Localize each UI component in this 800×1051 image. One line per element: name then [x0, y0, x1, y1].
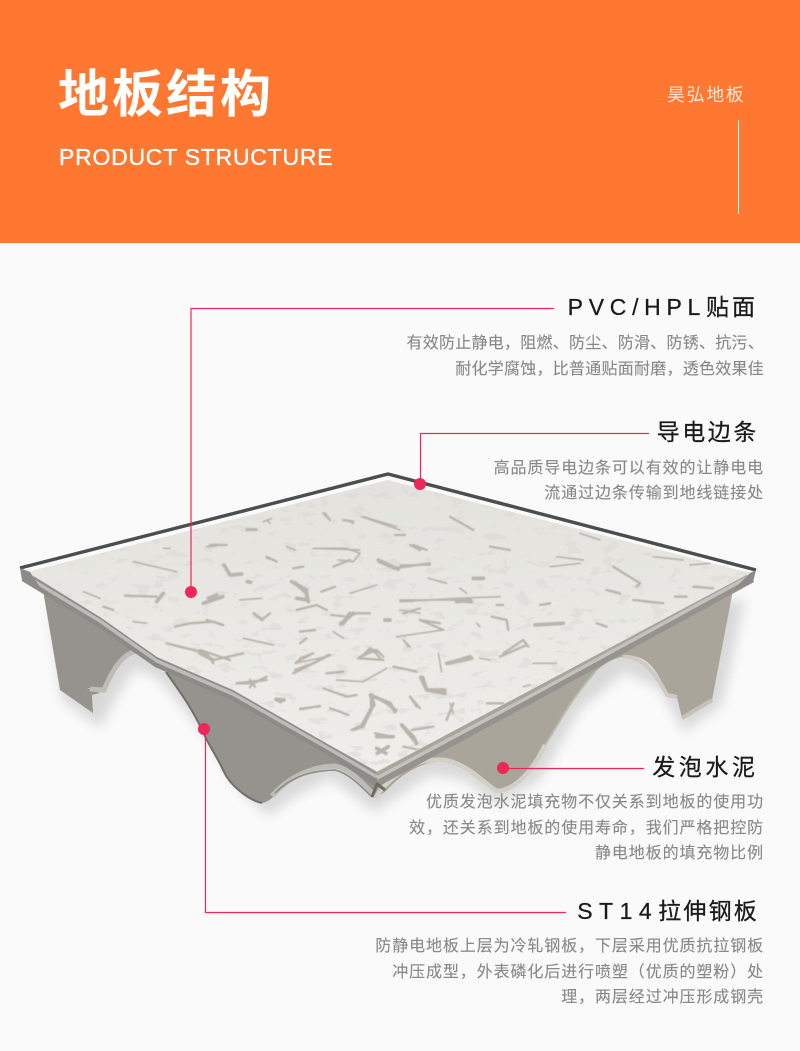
bottom marks: [237, 645, 530, 753]
left steel leg and cement side: [30, 572, 377, 803]
right cement side: [375, 574, 748, 798]
floor panel illustration: [20, 472, 756, 816]
callout: conductive edge: [494, 419, 764, 502]
description: 冲压成型，外表磷化后进行喷塑（优质的塑粉）处: [392, 964, 764, 980]
heading: 导电边条: [657, 419, 759, 445]
header band: [0, 0, 800, 243]
callout: foamed cement: [409, 754, 764, 862]
front rims: [24, 575, 752, 797]
right marks: [400, 517, 713, 743]
leader: foamed cement: [497, 762, 644, 774]
description: [409, 793, 764, 862]
brand name: 昊弘地板: [667, 85, 745, 105]
back edge: [20, 474, 756, 570]
heading: 发泡水泥: [652, 754, 759, 780]
heading: ST14拉伸钢板: [577, 898, 759, 924]
description: 理，两层经过冲压形成钢壳: [561, 989, 764, 1006]
leader: steel plate: [198, 723, 566, 912]
description: 高品质导电边条可以有效的让静电电: [494, 460, 764, 476]
leader: PVC/HPL: [185, 308, 554, 598]
heading: PVC/HPL贴面: [568, 294, 758, 320]
title: 地板结构: [58, 66, 274, 123]
callout: steel plate: [375, 898, 764, 1006]
brand vertical rule: [738, 120, 739, 214]
description: 流通过边条传输到地线链接处: [544, 485, 764, 502]
subtitle: PRODUCT STRUCTURE: [59, 144, 333, 170]
description: 优质发泡水泥填充物不仅关系到地板的使用功: [426, 794, 764, 811]
left marks: [83, 513, 400, 753]
description: [375, 937, 764, 1006]
description: 防静电地板上层为冷轧钢板，下层采用优质抗拉钢板: [375, 938, 764, 955]
top marks: [200, 513, 500, 663]
top laminate surface: [20, 474, 760, 774]
description: 有效防止静电，阻燃、防尘、防滑、防锈、抗污、: [406, 335, 764, 352]
left and right corners: [20, 568, 756, 592]
description: [494, 459, 764, 502]
callout: PVC/HPL: [406, 294, 764, 378]
description: 耐化学腐蚀，比普通贴面耐磨，透色效果佳: [455, 360, 764, 378]
description: 效，还关系到地板的使用寿命，我们严格把控防: [409, 820, 764, 836]
panel drop shadow: [50, 600, 745, 816]
description: [406, 334, 764, 378]
leader: conductive edge: [414, 434, 649, 490]
description: 静电地板的填充物比例: [595, 845, 764, 862]
